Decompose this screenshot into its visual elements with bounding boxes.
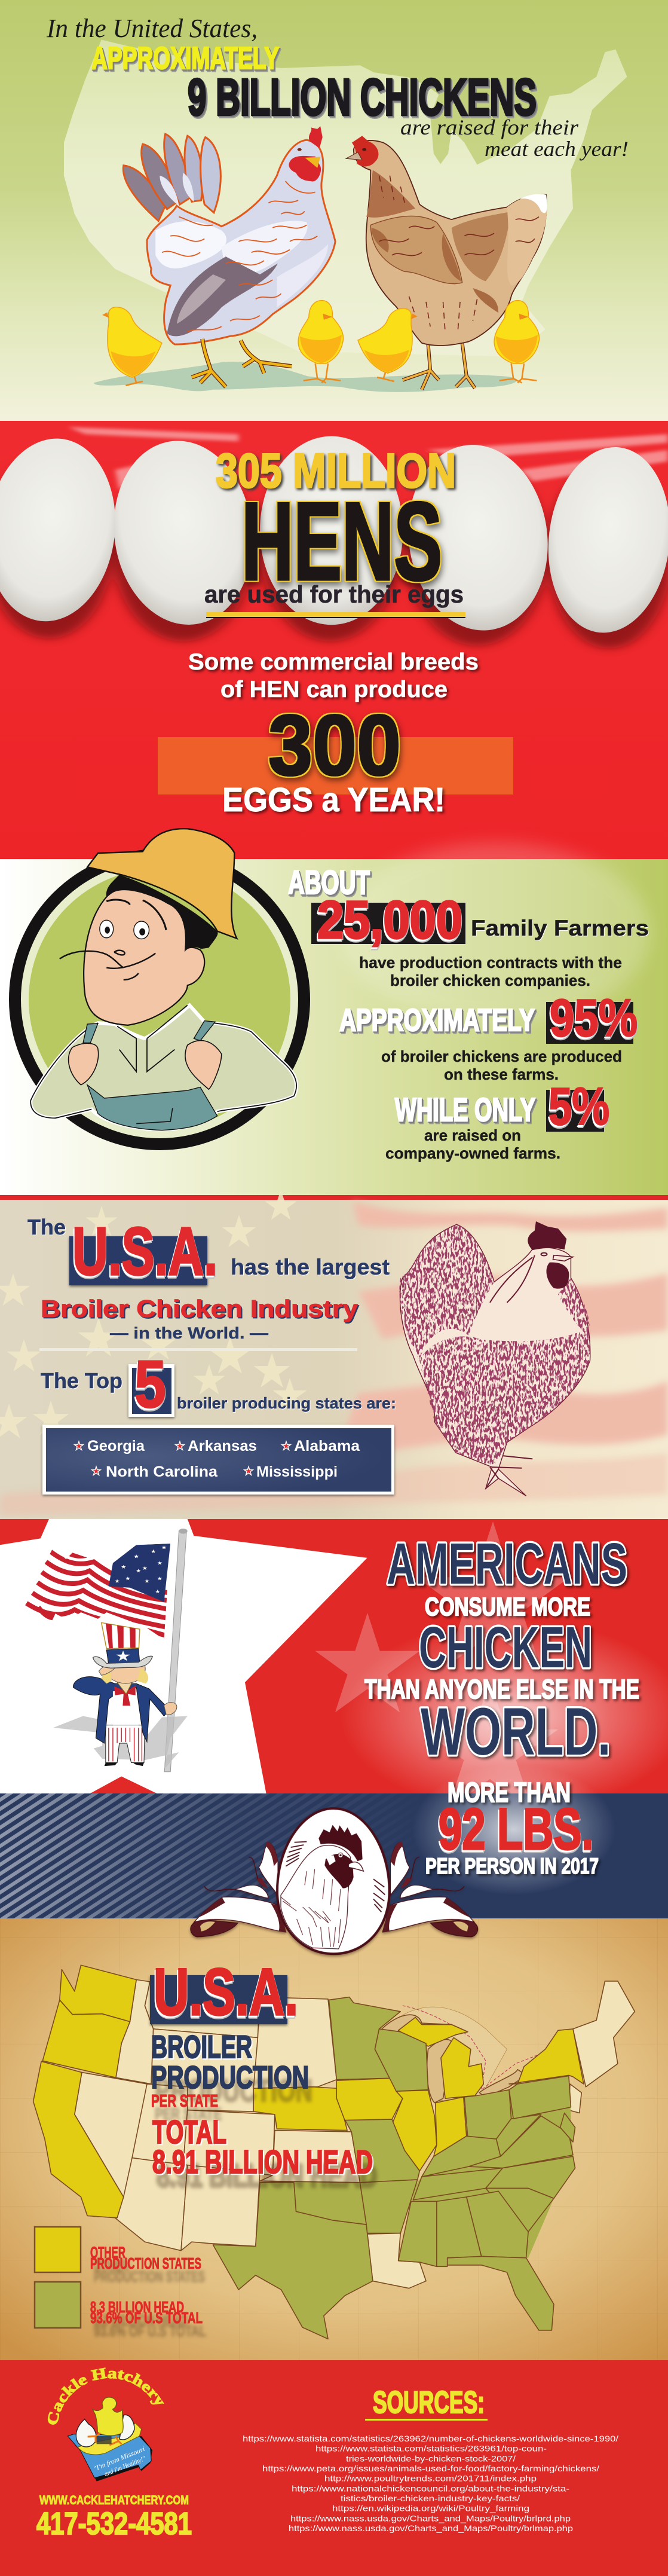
eyes and brows: [60, 900, 166, 980]
state: Mississippi: Mississippi: [256, 1463, 338, 1480]
flag stripes backdrop: [0, 1202, 668, 1515]
panel: hens and eggs: [0, 421, 668, 859]
text: family farmers: Family Farmers: [471, 916, 649, 940]
list: source links: https://www.nass.usda.gov/Charts_and_Maps/Poultry/brlmap.php: [289, 2523, 573, 2533]
brown hen: [403, 343, 475, 390]
eggs: [0, 436, 668, 635]
list: source links: https://www.statista.com/statistics/263962/number-of-chickens-worldwide-since-1990/: [243, 2434, 618, 2443]
legend: other production states: [35, 2227, 201, 2272]
text: The: The: [27, 1215, 66, 1239]
list: source links: https://www.statista.com/statistics/263961/top-coun-: [315, 2444, 547, 2453]
chick 2: [298, 301, 344, 383]
underline: [365, 2419, 488, 2421]
box: usa: [150, 1975, 287, 2024]
text: broiler companies: broiler chicken companies.: [390, 971, 590, 989]
choropleth map of the states: [33, 1965, 635, 2339]
state: Alabama: Alabama: [294, 1438, 360, 1454]
slogan text: "I'm from Missouri: [93, 2446, 146, 2473]
chick feet: [88, 2433, 121, 2445]
hair: [106, 875, 218, 950]
list: source links: tistics/broiler-chicken-industry-key-facts/: [341, 2494, 520, 2503]
text: of broiler chickens: of broiler chickens are produced: [381, 1047, 622, 1065]
eggshells: [76, 2419, 96, 2447]
white hen: [123, 134, 335, 344]
yellow states: [33, 1965, 584, 2218]
heading: total head: 8.91 BILLION HEAD: [152, 2143, 373, 2180]
divider strip: [0, 1195, 668, 1200]
legend: other production states: OTHER: [90, 2244, 125, 2262]
egg shadows: [0, 453, 668, 649]
list: source links: [243, 2434, 618, 2533]
list: source links: http://www.poultrytrends.com/201711/index.php: [324, 2474, 537, 2483]
text: website: WWW.CACKLEHATCHERY.COM: [39, 2494, 189, 2507]
chick 1: [102, 307, 162, 386]
illustration: engraved rooster: [399, 1221, 590, 1496]
ribbon left: [191, 1842, 286, 1937]
text: eggs a year: EGGS a YEAR!: [222, 781, 445, 819]
legend: main production states: [35, 2282, 203, 2328]
chick 4: [494, 301, 540, 383]
state: Arkansas: Arkansas: [188, 1438, 257, 1454]
box: five: [128, 1364, 174, 1417]
chick: [93, 2397, 123, 2436]
heading: In the United States: In the United States,: [46, 14, 258, 43]
state: North Carolina: North Carolina: [106, 1463, 218, 1480]
panel: Americans consume more chicken: [0, 1519, 668, 1918]
text: while only: WHILE ONLY: [395, 1091, 535, 1128]
panel: family farmers: [0, 829, 668, 1195]
state: Georgia: Georgia: [87, 1438, 145, 1454]
rooster head: [281, 1845, 351, 1949]
heading: 305 million: 305 MILLION: [216, 444, 456, 498]
heading: total: TOTAL: [152, 2113, 226, 2150]
illustration: uncle sam: [53, 1622, 188, 1769]
missouri shape shadow: [70, 2435, 152, 2482]
divider: [39, 1348, 357, 1351]
number: 95%: 95%: [550, 988, 638, 1047]
text: consume more: CONSUME MORE: [425, 1593, 590, 1621]
text: more than: MORE THAN: [448, 1777, 571, 1808]
Canada and lakes outlines: [384, 2007, 507, 2101]
neck engraving strokes: [281, 1869, 341, 1947]
text: per state: PER STATE: [151, 2092, 218, 2111]
box: usa: [69, 1236, 207, 1285]
heading: approximately: APPROXIMATELY: [91, 41, 279, 76]
brand arc text: [57, 2378, 166, 2427]
text: in the world: — in the World. —: [110, 1324, 268, 1342]
emblem: rooster egg and ribbon: [191, 1808, 478, 1954]
box: 95%: [546, 1002, 633, 1044]
translucent stars: [315, 1521, 569, 1810]
number: 92 lbs: 92 LBS.: [439, 1796, 593, 1862]
number: 5%: 5%: [549, 1077, 609, 1136]
heading: production: PRODUCTION: [151, 2060, 309, 2095]
legend: main production states: 8.3 BILLION HEAD: [90, 2298, 184, 2316]
text: approximately: APPROXIMATELY: [339, 1003, 535, 1038]
text: company-owned farms: company-owned farms.: [385, 1144, 560, 1162]
text: contracts: have production contracts with the: [359, 954, 622, 971]
overalls: [83, 1021, 217, 1130]
lakes: [381, 2015, 526, 2103]
list: source links: https://en.wikipedia.org/wiki/Poultry_farming: [332, 2504, 529, 2513]
panel: USA broiler industry: [0, 1190, 668, 1519]
list: source links: tries-worldwide-by-chicken-stock-2007/: [346, 2453, 516, 2463]
tail feather highlights: [160, 173, 194, 206]
white glow: [341, 1620, 668, 1811]
hands: [69, 1041, 222, 1089]
heading: U.S.A.: U.S.A.: [154, 1955, 298, 2029]
list: source links: https://www.nass.usda.gov/Charts_and_Maps/Poultry/brlprd.php: [290, 2513, 571, 2523]
green states: [213, 1997, 575, 2339]
illustration: american flag on pole: [17, 1529, 188, 1772]
panel: chickens intro: [0, 0, 668, 421]
text: of hen can produce: of HEN can produce: [220, 677, 448, 702]
legend: other production states: PRODUCTION STATES: [90, 2254, 201, 2272]
missouri shape: [68, 2434, 151, 2478]
farmer figure: [30, 829, 296, 1130]
text: are raised on: are raised on: [424, 1126, 521, 1144]
large white star: [0, 1519, 367, 1794]
text: broiler producing states: broiler producing states are:: [177, 1394, 396, 1412]
heading: sources: SOURCES:: [373, 2385, 485, 2420]
panel: top five states: [42, 1425, 394, 1495]
brown hen feather scallops: [379, 217, 539, 256]
ground shadow: [94, 362, 517, 392]
text: per person in 2017: PER PERSON IN 2017: [425, 1854, 599, 1878]
text: phone: 417-532-4581: [36, 2507, 192, 2541]
ribbon right: [382, 1842, 478, 1937]
text: meat each year: meat each year!: [485, 137, 629, 161]
white hen feather scallops: [162, 181, 317, 332]
heading: broiler: BROILER: [151, 2030, 252, 2065]
slogan text: and I'm Healthy!": [103, 2455, 147, 2478]
icon: farmer badge: [15, 829, 304, 1144]
number: 25,000: 25,000: [317, 890, 462, 949]
illustration: hens and chicks: [94, 126, 547, 392]
egg: [277, 1808, 390, 1954]
radial glow on panel: [341, 843, 651, 1022]
box: 25,000: [311, 903, 465, 944]
diagonal stripes: [0, 1793, 350, 1918]
logo: Cackle Hatchery: [48, 2367, 164, 2482]
box: 5%: [546, 1090, 604, 1132]
hat: [87, 829, 237, 939]
cream states: [75, 1979, 635, 2288]
panel: USA production map: [0, 1918, 668, 2360]
heading: broiler chicken industry: Broiler Chicken Industry: [41, 1295, 358, 1322]
face: [84, 888, 204, 1025]
chick 3: [358, 308, 418, 381]
light streaks: [68, 427, 668, 490]
text: some commercial breeds: Some commercial breeds: [188, 649, 479, 675]
text: on these farms: on these farms.: [444, 1065, 559, 1083]
shirt: [30, 1006, 296, 1129]
slogan text: [93, 2446, 149, 2481]
navy band: [0, 1793, 668, 1918]
text: are used for their eggs: are used for their eggs: [204, 580, 464, 608]
list: source links: https://www.nationalchickencouncil.org/about-the-industry/sta-: [292, 2483, 569, 2493]
heading: hens: HENS: [241, 479, 442, 604]
text: are raised for their: are raised for their: [400, 115, 579, 139]
list: source links: https://www.peta.org/issues/animals-used-for-food/factory-farming/chickens/: [262, 2464, 599, 2473]
shell pieces: [97, 2436, 112, 2444]
underline: [206, 612, 465, 618]
highlight bar: [158, 737, 513, 795]
legend: main production states: 93.6% OF U.S TOTAL: [90, 2309, 203, 2327]
band glow: [412, 1764, 615, 1895]
nest: [78, 2423, 142, 2455]
flag stars backdrop: [0, 1190, 307, 1438]
heading: U.S.A.: U.S.A.: [72, 1214, 217, 1289]
number: 300: 300: [268, 697, 401, 793]
text: the top: The Top: [41, 1368, 122, 1393]
text: has the largest: has the largest: [231, 1255, 390, 1279]
text: about: ABOUT: [288, 863, 370, 901]
map silhouette of the USA: [64, 40, 627, 357]
number: 5: 5: [134, 1347, 166, 1422]
logo: Cackle Hatchery: Cackle Hatchery: [48, 2367, 164, 2425]
panel: footer: [0, 2360, 668, 2576]
